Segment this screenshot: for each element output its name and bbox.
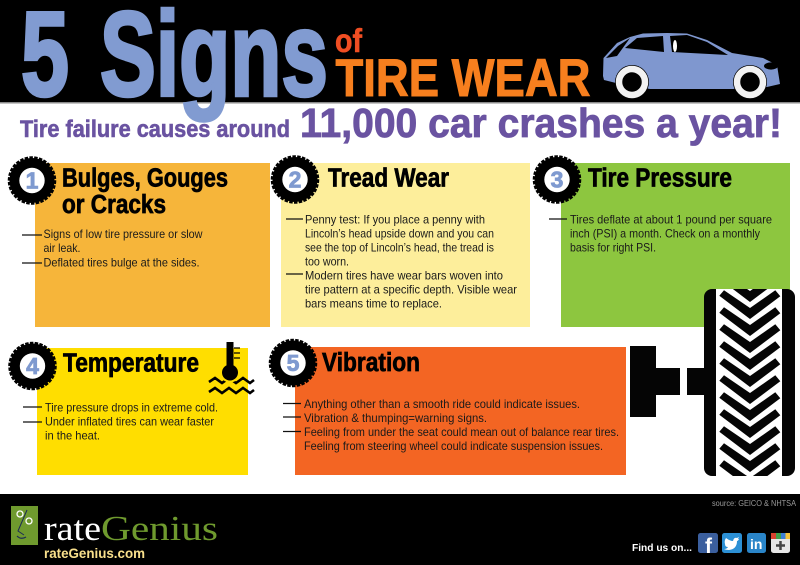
title: of bbox=[335, 22, 363, 59]
text block: basis for right PSI. bbox=[570, 240, 656, 254]
icon: tire number 5 bbox=[270, 340, 316, 386]
text block: Vibration & thumping=warning signs. bbox=[304, 411, 487, 425]
logo: rateGenius bbox=[11, 506, 218, 561]
icon: facebook bbox=[698, 533, 718, 558]
icon: tire number 3: 3 bbox=[551, 166, 563, 192]
text block: Feeling from under the seat could mean out of balance rear tires. bbox=[304, 425, 619, 439]
panel: tire pressure bbox=[534, 156, 790, 327]
icon: tire number 1 bbox=[9, 158, 55, 204]
title bbox=[21, 0, 590, 122]
text block: Under inflated tires can wear faster bbox=[45, 414, 214, 428]
heading: Tread Wear bbox=[328, 164, 449, 192]
subtitle bbox=[20, 100, 782, 146]
social links: Find us on... bbox=[632, 542, 692, 554]
subtitle: 11,000 car crashes a year! bbox=[300, 100, 782, 146]
text block: inch (PSI) a month. Check on a monthly bbox=[570, 226, 760, 240]
text block: in the heat. bbox=[45, 428, 100, 442]
icon: tire number 1: 1 bbox=[26, 168, 39, 194]
logo: rateGenius: Genius bbox=[101, 509, 218, 548]
heading: Tire Pressure bbox=[588, 164, 732, 192]
text block bbox=[283, 397, 619, 453]
icon: thermometer in water bbox=[209, 342, 254, 393]
header band bbox=[0, 0, 800, 102]
text block: Tire pressure drops in extreme cold. bbox=[45, 400, 218, 414]
text block: Lincoln’s head upside down and you can bbox=[305, 226, 494, 240]
icon: car bbox=[603, 33, 780, 99]
panel: vibration bbox=[270, 340, 626, 475]
text block bbox=[22, 227, 203, 270]
logo: rateGenius: rate bbox=[44, 509, 101, 548]
icon: tire number 2 bbox=[272, 156, 318, 202]
text block: air leak. bbox=[44, 241, 80, 255]
text block: Anything other than a smooth ride could indicate issues. bbox=[304, 397, 580, 411]
text block: tire pattern at a specific depth. Visible wear bbox=[305, 282, 517, 296]
heading: Vibration bbox=[322, 349, 420, 377]
text block: Modern tires have wear bars woven into bbox=[305, 268, 503, 282]
subtitle: Tire failure causes around bbox=[20, 116, 290, 143]
icon: twitter bbox=[722, 533, 742, 553]
icon: google plus bbox=[771, 533, 790, 553]
title: TIRE WEAR bbox=[336, 49, 590, 108]
heading: Temperature bbox=[63, 350, 199, 378]
text block bbox=[549, 212, 772, 254]
heading: Bulges, Gouges bbox=[62, 164, 228, 192]
icon: linkedin bbox=[747, 533, 766, 553]
panel: temperature bbox=[10, 342, 254, 475]
text block: Feeling from steering wheel could indicate suspension issues. bbox=[304, 439, 603, 453]
logo: rateGenius: rateGenius.com bbox=[44, 545, 145, 561]
text block: Penny test: If you place a penny with bbox=[305, 212, 485, 226]
heading bbox=[62, 164, 228, 219]
icon: tire number 4 bbox=[10, 343, 56, 389]
text block: too worn. bbox=[305, 254, 349, 268]
text block: see the top of Lincoln’s head, the tread is bbox=[305, 240, 494, 254]
icon: tire number 3 bbox=[534, 156, 580, 202]
icon: tire number 5: 5 bbox=[287, 350, 300, 376]
text block bbox=[23, 400, 218, 442]
social links bbox=[632, 533, 790, 558]
icon: tire number 4: 4 bbox=[26, 353, 39, 379]
panel: tread wear bbox=[272, 156, 530, 327]
icon: facebook: f bbox=[705, 535, 713, 558]
text block: Signs of low tire pressure or slow bbox=[44, 227, 203, 241]
text block: Tires deflate at about 1 pound per square bbox=[570, 212, 772, 226]
footer band bbox=[0, 494, 800, 565]
heading: or Cracks bbox=[62, 191, 166, 219]
icon: tire number 2: 2 bbox=[289, 166, 301, 192]
icon: tire tread bbox=[704, 289, 795, 476]
icon: axle bbox=[630, 346, 705, 417]
text block: Deflated tires bulge at the sides. bbox=[44, 256, 200, 270]
text block: bars means time to replace. bbox=[305, 296, 442, 310]
panel: bulges, gouges or cracks bbox=[9, 158, 270, 327]
text block bbox=[286, 212, 517, 310]
icon: linkedin: in bbox=[750, 536, 762, 552]
